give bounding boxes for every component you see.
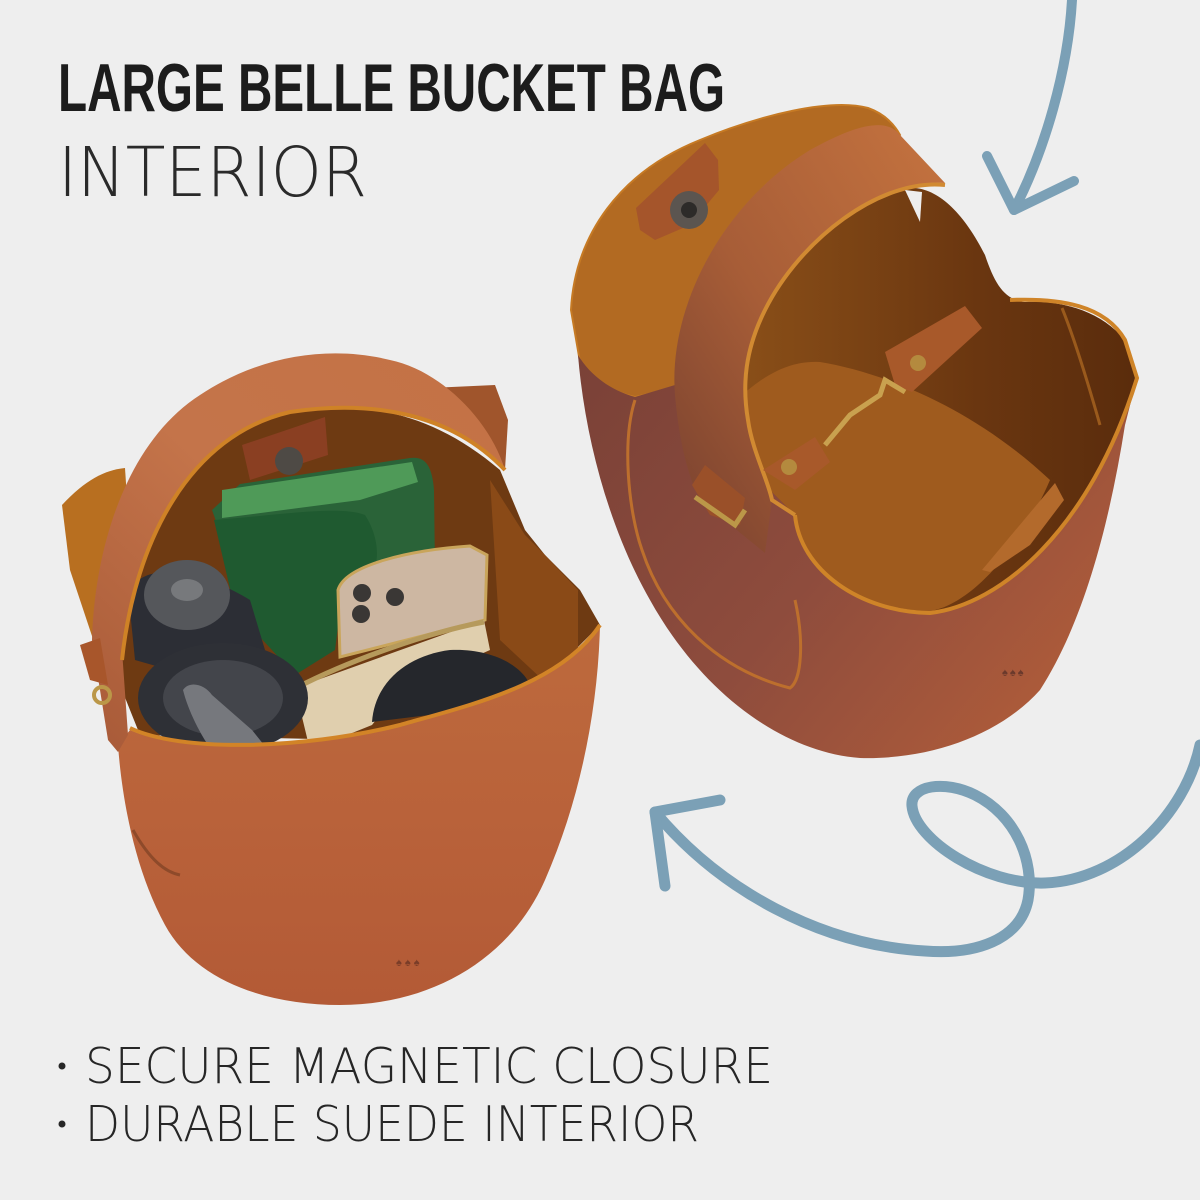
pouch zipper xyxy=(296,622,484,688)
back flap right xyxy=(430,385,508,470)
umbrella body xyxy=(128,572,265,670)
bullet: durable suede interior: DURABLE SUEDE INTERIOR xyxy=(85,1096,699,1153)
back flap left xyxy=(62,468,135,660)
right side tab xyxy=(982,483,1064,572)
title: INTERIOR xyxy=(58,133,367,213)
arrow: bottom looping arrow xyxy=(655,745,1200,952)
strap rim xyxy=(122,408,505,660)
interior right wall xyxy=(490,480,578,682)
strap loop buckle xyxy=(80,638,108,685)
logo marks: ♠♠♠ xyxy=(1002,667,1026,679)
gold hook xyxy=(825,380,905,445)
title xyxy=(58,50,725,213)
strap handle xyxy=(674,125,945,553)
phone camera xyxy=(352,584,404,623)
green notebook xyxy=(214,511,377,675)
beige pouch xyxy=(295,620,490,750)
snap tab xyxy=(242,417,328,480)
green wallet flap xyxy=(222,462,418,518)
body seam xyxy=(628,400,801,688)
product photo: closed-side open bag (right) xyxy=(571,105,1137,758)
interior rim xyxy=(795,300,1137,613)
green wallet back xyxy=(212,458,435,590)
side strap loop xyxy=(692,465,745,525)
strap rim xyxy=(745,184,945,515)
arrow: top right, pointing to open bag xyxy=(987,0,1074,210)
front rim xyxy=(130,625,600,745)
interior floor xyxy=(742,362,1050,611)
logo marks: ♠♠♠ xyxy=(396,957,423,969)
product photo: filled bag (left) xyxy=(62,353,600,1005)
wheel handle xyxy=(183,685,272,755)
flap suede xyxy=(571,105,900,397)
magnetic snap xyxy=(670,191,708,229)
bottle cap xyxy=(144,560,230,630)
bag body xyxy=(578,355,1137,758)
strap hole xyxy=(905,190,922,222)
bullet list xyxy=(58,1038,773,1153)
hook strap upper xyxy=(885,306,982,392)
right wall seam xyxy=(1062,308,1100,425)
title: LARGE BELLE BUCKET BAG xyxy=(58,50,725,126)
interior xyxy=(118,408,600,740)
black lid right xyxy=(372,650,532,722)
phone xyxy=(338,546,487,657)
hook strap lower xyxy=(763,437,830,490)
bullet: secure magnetic closure: SECURE MAGNETIC CLOSURE xyxy=(85,1038,773,1095)
bag front body xyxy=(118,625,600,1005)
side seam xyxy=(133,830,180,875)
snap tab xyxy=(636,143,719,240)
handle strap xyxy=(92,353,505,752)
interior xyxy=(740,188,1137,613)
black wheel xyxy=(138,643,308,753)
